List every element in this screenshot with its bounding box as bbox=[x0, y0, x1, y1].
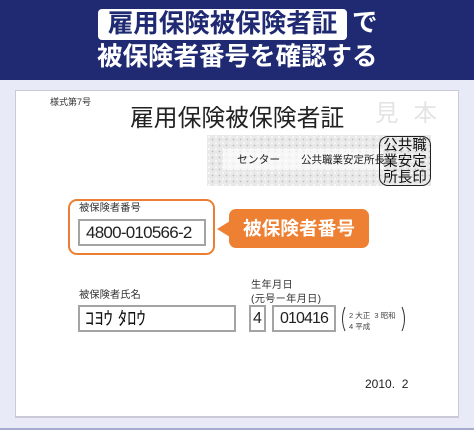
callout: insured number bbox=[217, 209, 369, 248]
official stamp: 公共職 bbox=[383, 138, 427, 154]
issue date: 2010. 2 bbox=[365, 377, 408, 391]
birth date box bbox=[272, 305, 336, 332]
title particle: で bbox=[352, 9, 378, 37]
number box bbox=[78, 219, 206, 246]
name box bbox=[78, 305, 236, 332]
title second line: 被保険者番号を確認する bbox=[97, 43, 378, 71]
era options: 2 大正 3 昭和 bbox=[349, 311, 396, 320]
field label: 被保険者番号 bbox=[79, 203, 141, 214]
birth date label bbox=[251, 279, 321, 305]
callout body: 被保険者番号 bbox=[243, 218, 355, 239]
era legend bbox=[342, 306, 405, 332]
bottom edge bbox=[0, 428, 474, 430]
security pattern bbox=[207, 135, 431, 186]
number box: 4800-010566-2 bbox=[86, 223, 192, 242]
header banner bbox=[0, 0, 474, 80]
callout body bbox=[229, 209, 369, 248]
office name: center: センター bbox=[237, 154, 280, 166]
birth date label: (元号ー年月日) bbox=[251, 294, 321, 305]
name box: ｺﾖｳ ﾀﾛｳ bbox=[85, 308, 146, 329]
era options: 4 平成 bbox=[349, 322, 370, 331]
highlighted insured number field bbox=[68, 199, 215, 255]
era box: 4 bbox=[253, 310, 262, 327]
left paren bbox=[342, 306, 346, 332]
official stamp bbox=[379, 136, 431, 186]
callout pointer bbox=[217, 222, 229, 236]
right paren bbox=[402, 306, 405, 332]
office name: director: 公共職業安定所長 bbox=[301, 154, 385, 166]
name label: 被保険者氏名 bbox=[79, 290, 141, 301]
era options bbox=[349, 311, 396, 331]
card title: 雇用保険被保険者証 bbox=[130, 105, 344, 132]
birth date label: 生年月日 bbox=[251, 280, 293, 291]
era box bbox=[249, 305, 266, 332]
sample watermark: 見本 bbox=[375, 100, 452, 126]
form number: 様式第7号 bbox=[50, 97, 91, 107]
title highlight box: 雇用保険被保険者証 bbox=[108, 10, 337, 38]
official stamp: 所長印 bbox=[383, 170, 427, 186]
birth date box: 010416 bbox=[280, 310, 328, 327]
official stamp: 業安定 bbox=[383, 154, 427, 170]
panel: insurance card bbox=[15, 90, 459, 418]
